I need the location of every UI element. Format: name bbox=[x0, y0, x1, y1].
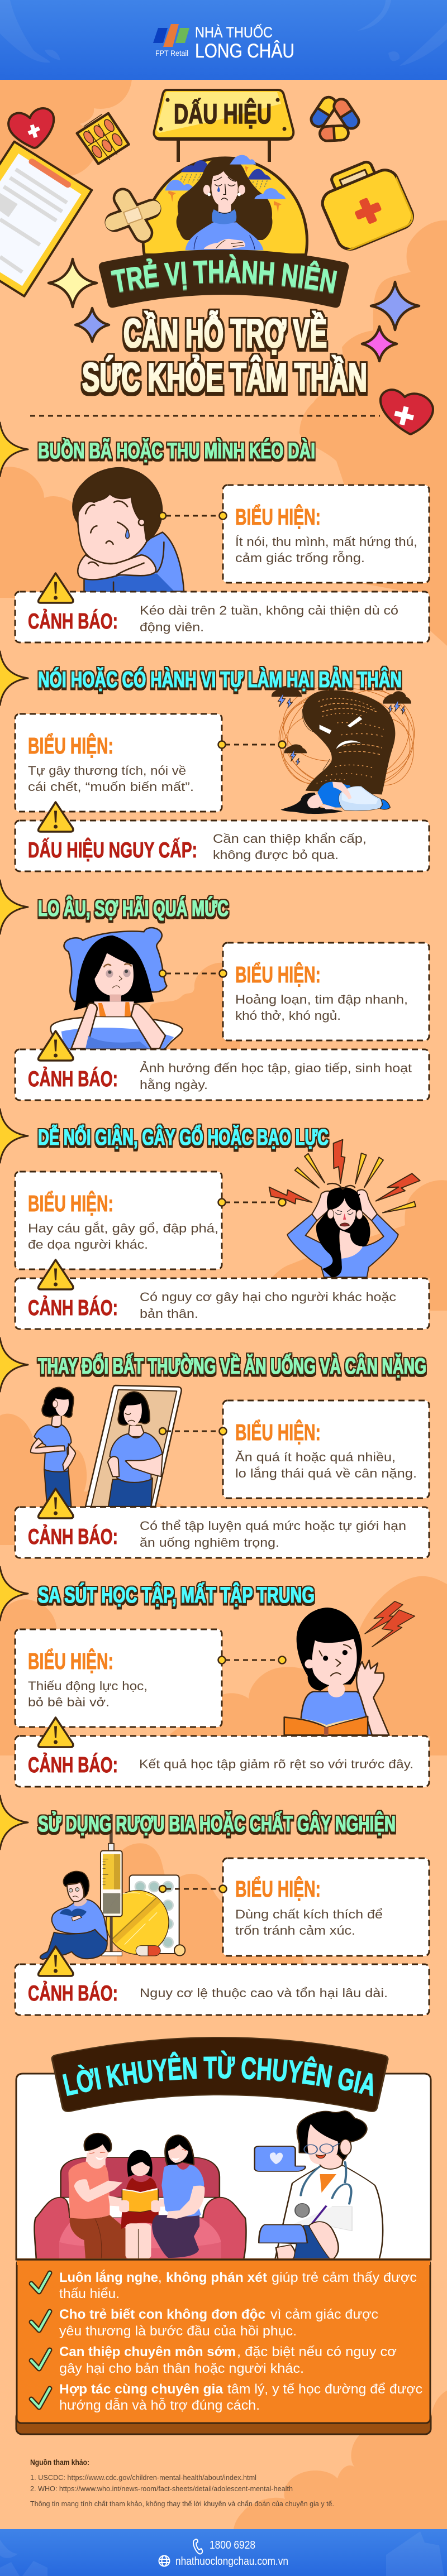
warning card: CẢNH BÁO: bbox=[28, 609, 118, 634]
logo: FPT Retail bbox=[153, 24, 189, 57]
warning card bbox=[15, 1718, 429, 1787]
white illustration panel bbox=[16, 2074, 431, 2260]
icon: phone bbox=[193, 2539, 202, 2554]
symptoms card: BIỂU HIỆN: bbox=[28, 1190, 113, 1216]
section 2: self-harm bbox=[0, 651, 429, 871]
symptoms card: Hoảng loạn, tim đập nhanh, bbox=[235, 992, 408, 1006]
connector bbox=[159, 1428, 227, 1435]
symptoms card bbox=[15, 1629, 226, 1727]
star marker bbox=[0, 1109, 28, 1163]
warning card: CẢNH BÁO: bbox=[28, 1067, 118, 1091]
warning card: CẢNH BÁO: bbox=[28, 1524, 118, 1549]
symptoms card bbox=[219, 1858, 429, 1956]
warning card: Nguy cơ lệ thuộc cao và tổn hại lâu dài. bbox=[140, 1986, 388, 2000]
icon: globe bbox=[159, 2555, 170, 2567]
advice 4: hướng dẫn và hỗ trợ đúng cách. bbox=[59, 2398, 260, 2413]
section 1: sadness bbox=[0, 423, 429, 642]
advice 2 bbox=[31, 2307, 378, 2339]
advice 4: Hợp tác cùng chuyên gia bbox=[59, 2382, 224, 2397]
illustration: family on sofa bbox=[35, 2133, 246, 2259]
symptoms card: Thiếu động lực học, bbox=[28, 1679, 148, 1693]
warning card: DẤU HIỆU NGUY CẤP: bbox=[28, 838, 197, 862]
advice 2: Cho trẻ biết con không đơn độc bbox=[59, 2307, 265, 2322]
symptoms card: Hay cáu gắt, gây gổ, đập phá, bbox=[28, 1221, 218, 1235]
header band bbox=[0, 0, 447, 80]
logo: FPT Retail: FPT Retail bbox=[155, 49, 188, 57]
star marker bbox=[0, 1567, 28, 1620]
references: 2. WHO: https://www.who.int/news-room/fact-sheets/detail/adolescent-mental-health bbox=[30, 2484, 293, 2493]
title: LO ÂU, SỢ HÃI QUÁ MỨC bbox=[38, 895, 229, 921]
star marker bbox=[0, 1796, 28, 1849]
main title: CẦN HỖ TRỢ VỀ bbox=[123, 310, 327, 356]
illustration: dark scribble tornado bbox=[272, 671, 420, 814]
arched banner: advice title bbox=[51, 2037, 389, 2112]
star marker bbox=[0, 1338, 28, 1392]
lying woman bbox=[280, 793, 343, 814]
hair bbox=[177, 157, 272, 240]
illustration: woman and mirror bbox=[31, 1385, 182, 1507]
warning card: Kéo dài trên 2 tuần, không cải thiện dù có bbox=[140, 603, 398, 617]
sign board: Dấu hiệu: DẤU HIỆU bbox=[174, 98, 272, 129]
illustration: crying boy bbox=[73, 468, 184, 592]
section 6: school decline bbox=[0, 1567, 429, 1787]
neck bbox=[218, 203, 231, 214]
warning card bbox=[15, 1031, 429, 1100]
symptoms card bbox=[219, 943, 429, 1040]
advice 3: , đặc biệt nếu có nguy cơ bbox=[237, 2344, 397, 2359]
folded hands bbox=[204, 239, 245, 249]
star marker bbox=[0, 880, 28, 934]
connector bbox=[225, 1657, 286, 1663]
advice 3 bbox=[31, 2344, 397, 2376]
advice 3: gây hại cho bản thân hoặc người khác. bbox=[59, 2361, 304, 2376]
warning card: Ảnh hưởng đến học tập, giao tiếp, sinh hoạt bbox=[140, 1061, 412, 1075]
hero circle with worried girl bbox=[143, 155, 307, 255]
phone number: 1800 6928 bbox=[210, 2539, 255, 2551]
connector bbox=[225, 1199, 286, 1206]
symptoms card: BIỂU HIỆN: bbox=[28, 1648, 113, 1674]
advice 4: tâm lý, y tế học đường để được bbox=[227, 2382, 422, 2397]
section 3: anxiety bbox=[0, 880, 429, 1100]
advice 1: thấu hiểu. bbox=[59, 2286, 120, 2301]
warning card: bản thân. bbox=[140, 1307, 198, 1321]
advice 1 bbox=[31, 2270, 417, 2301]
heart icon right bbox=[381, 390, 433, 434]
brand name: LONG CHÂU bbox=[195, 40, 294, 62]
illustration: doctor bbox=[255, 2111, 383, 2259]
warning card bbox=[15, 1489, 429, 1558]
illustration: angry woman bbox=[269, 1140, 420, 1277]
symptoms card: lo lắng thái quá về cân nặng. bbox=[235, 1466, 417, 1480]
warning card: Có nguy cơ gây hại cho người khác hoặc bbox=[140, 1290, 396, 1304]
symptoms card bbox=[219, 1400, 429, 1498]
advice 1: Luôn lắng nghe bbox=[59, 2270, 158, 2285]
storm clouds bbox=[165, 160, 272, 202]
website: nhathuoclongchau.com.vn bbox=[175, 2555, 288, 2568]
brand name: NHÀ THUỐC bbox=[195, 23, 273, 41]
connector bbox=[225, 741, 286, 748]
panel base shadow bbox=[16, 2411, 431, 2434]
medical bag bbox=[313, 153, 417, 253]
blister pack bbox=[77, 113, 129, 164]
symptoms card: trốn tránh cảm xúc. bbox=[235, 1923, 355, 1937]
symptoms card bbox=[219, 485, 429, 583]
warning card bbox=[15, 802, 429, 871]
main title bbox=[82, 310, 367, 400]
star marker bbox=[0, 423, 28, 476]
illustration: syringe, pills and man bbox=[40, 1814, 185, 1959]
references bbox=[30, 2458, 334, 2508]
upper clouds bbox=[230, 155, 256, 165]
warning card: hằng ngày. bbox=[140, 1078, 208, 1092]
symptoms card: Ăn quá ít hoặc quá nhiều, bbox=[235, 1450, 396, 1464]
advice 2: yêu thương là bước đầu của hồi phục. bbox=[59, 2324, 297, 2339]
symptoms card: bỏ bê bài vở. bbox=[28, 1695, 110, 1709]
connector bbox=[159, 512, 227, 519]
bandage icon bbox=[103, 186, 163, 245]
footer band bbox=[0, 2529, 447, 2576]
sign board: Dấu hiệu bbox=[154, 90, 293, 162]
warning card: động viên. bbox=[140, 620, 204, 634]
symptoms card bbox=[15, 714, 226, 812]
advice 1: không phán xét bbox=[166, 2270, 267, 2285]
warning card: CẢNH BÁO: bbox=[28, 1296, 118, 1320]
arched banner: advice title: LỜI KHUYÊN TỪ CHUYÊN GIA bbox=[63, 2051, 373, 2097]
warning card: Có thể tập luyện quá mức hoặc tự giới hạn bbox=[140, 1519, 406, 1533]
warning card bbox=[15, 1260, 429, 1329]
symptoms card: khó thở, khó ngủ. bbox=[235, 1009, 341, 1023]
hero illustrations bbox=[0, 94, 433, 434]
connector bbox=[159, 1886, 227, 1892]
warning card: Kết quả học tập giảm rõ rệt so với trước đây. bbox=[139, 1757, 413, 1771]
symptoms card: BIỂU HIỆN: bbox=[235, 503, 321, 530]
sparkles bbox=[49, 259, 419, 361]
warning card: không được bỏ qua. bbox=[213, 848, 339, 862]
title: SA SÚT HỌC TẬP, MẤT TẬP TRUNG bbox=[38, 1582, 315, 1608]
brand name bbox=[195, 23, 294, 62]
references: Thông tin mang tính chất tham khảo, không thay thế lời khuyên và chẩn đoán của chuyên gia y tế. bbox=[30, 2500, 334, 2508]
symptoms card: Dùng chất kích thích để bbox=[235, 1907, 383, 1921]
star marker bbox=[0, 651, 28, 705]
warning card bbox=[15, 1946, 429, 2015]
connector bbox=[159, 970, 227, 977]
symptoms card: đe dọa người khác. bbox=[28, 1237, 148, 1251]
section 5: eating and weight bbox=[0, 1338, 429, 1558]
symptoms card: BIỂU HIỆN: bbox=[235, 1419, 321, 1445]
advice 1: , bbox=[158, 2270, 162, 2285]
references: 1. USCDC: https://www.cdc.gov/children-mental-health/about/index.html bbox=[30, 2473, 256, 2482]
capsules bbox=[308, 94, 362, 141]
panel: expert advice bbox=[16, 2037, 431, 2435]
advice 3: Can thiệp chuyên môn sớm bbox=[59, 2344, 236, 2359]
references: Nguồn tham khảo: bbox=[30, 2458, 89, 2467]
face bbox=[211, 171, 238, 207]
symptoms card: Ít nói, thu mình, mất hứng thú, bbox=[235, 535, 417, 549]
warning card: ăn uống nghiêm trọng. bbox=[140, 1536, 279, 1550]
clipboard bbox=[0, 142, 92, 296]
symptoms card: cái chết, “muốn biến mất”. bbox=[28, 780, 194, 794]
heart icon left bbox=[8, 108, 54, 148]
sweater bbox=[186, 222, 264, 250]
title: BUỒN BÃ HOẶC THU MÌNH KÉO DÀI bbox=[38, 438, 315, 463]
arched banner: Trẻ vị thành niên: TRẺ VỊ THÀNH NIÊN bbox=[111, 254, 337, 294]
symptoms card: cảm giác trống rỗng. bbox=[235, 551, 365, 565]
advice 2: vì cảm giác được bbox=[270, 2307, 378, 2322]
speech bubble bbox=[255, 2146, 305, 2171]
illustration: sleepless girl bbox=[50, 928, 183, 1048]
section 7: substance use bbox=[0, 1796, 429, 2015]
advice 4 bbox=[31, 2382, 422, 2413]
warning card bbox=[15, 573, 429, 642]
warning card: Cần can thiệp khẩn cấp, bbox=[213, 832, 367, 846]
advice 1: giúp trẻ cảm thấy được bbox=[272, 2270, 417, 2285]
symptoms card: BIỂU HIỆN: bbox=[28, 732, 113, 759]
dark clouds bbox=[272, 686, 411, 753]
symptoms card: BIỂU HIỆN: bbox=[235, 961, 321, 987]
symptoms card: Tự gây thương tích, nói về bbox=[28, 764, 186, 778]
illustration: girl with book bbox=[284, 1601, 415, 1735]
orange advice panel bbox=[17, 2260, 430, 2423]
warning card: CẢNH BÁO: bbox=[28, 1753, 118, 1777]
symptoms card bbox=[15, 1172, 226, 1269]
section 4: anger bbox=[0, 1109, 429, 1329]
symptoms card: BIỂU HIỆN: bbox=[235, 1875, 321, 1902]
warning card: CẢNH BÁO: bbox=[28, 1981, 118, 2006]
